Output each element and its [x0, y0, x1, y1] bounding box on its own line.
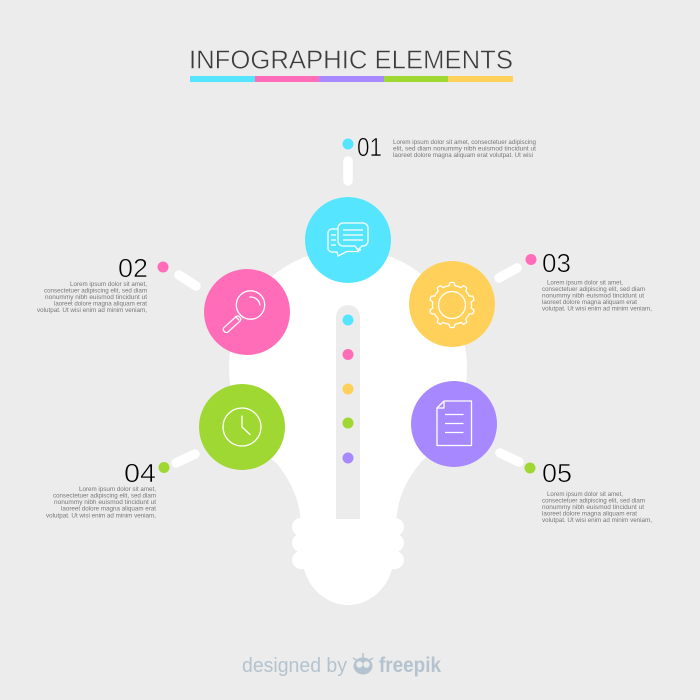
connectors: [176, 161, 519, 463]
item 04 label: volutpat. Ut wisi enim ad minim veniam,: [46, 514, 156, 520]
stem dots: [342, 314, 354, 464]
item 02 circle: magnifier icon: [204, 269, 290, 355]
item 03 label: volutpat. Ut wisi enim ad minim veniam,: [542, 306, 652, 312]
item 03 circle: gear icon: [409, 261, 495, 347]
item 05 label: [524, 460, 652, 524]
item 03 label: [526, 250, 652, 312]
bulb filament stem: [336, 305, 360, 519]
item 05 circle: document icon: [411, 381, 497, 467]
footer: designed by freepik: [242, 653, 441, 677]
item 04 label: 04: [124, 460, 156, 488]
item 03 label: Lorem ipsum dolor sit amet,: [547, 280, 623, 286]
item 04 label: Lorem ipsum dolor sit amet,: [79, 487, 156, 493]
item 01 label: Lorem ipsum dolor sit amet, consectetuer adipiscing: [393, 140, 536, 146]
item 03 label: nonummy nibh euismod tincidunt ut: [542, 294, 644, 300]
item 05 label: laoreet dolore magna aliquam erat: [542, 512, 637, 518]
item 02 label: [37, 255, 168, 314]
item 05 label: nonummy nibh euismod tincidunt ut: [542, 505, 644, 511]
item 03 label: consectetuer adipiscing elit, sed diam: [542, 287, 645, 293]
item 01 circle: chat icon: [305, 197, 391, 283]
item 01 label: elit, sed diam nonummy nibh euismod tincidunt ut: [393, 146, 536, 152]
item 01 label: 01: [357, 134, 382, 162]
item 05 label: consectetuer adipiscing elit, sed diam: [542, 498, 645, 504]
item 05 label: volutpat. Ut wisi enim ad minim veniam,: [542, 518, 652, 524]
item 03 label: laoreet dolore magna aliquam erat: [542, 300, 637, 306]
title: INFOGRAPHIC ELEMENTS: [189, 46, 513, 74]
item 04 label: consectetuer adipiscing elit, sed diam: [53, 494, 156, 500]
item 04 label: nonummy nibh euismod tincidunt ut: [54, 500, 156, 506]
item 02 label: consectetuer adipiscing elit, sed diam: [44, 288, 147, 294]
item 02 label: Lorem ipsum dolor sit amet,: [70, 282, 147, 288]
title colour bar: [190, 76, 513, 82]
footer: designed by freepik: designed by: [242, 655, 347, 677]
light bulb: [229, 249, 467, 605]
item 02 label: 02: [118, 255, 148, 283]
item 05 label: Lorem ipsum dolor sit amet,: [547, 492, 623, 498]
item 04 label: laoreet dolore magna aliquam erat: [61, 506, 156, 512]
footer: designed by freepik: freepik: [379, 654, 441, 677]
icon: freepik mascot: [353, 653, 373, 674]
item 02 label: nonummy nibh euismod tincidunt ut: [45, 295, 147, 301]
item 02 label: volutpat. Ut wisi enim ad minim veniam,: [37, 308, 147, 314]
item 02 label: laoreet dolore magna aliquam erat: [54, 302, 147, 308]
item 04 circle: clock icon: [199, 384, 285, 470]
item 05 label: 05: [542, 460, 572, 488]
item 01 label: [342, 134, 536, 162]
item 01 label: laoreet dolore magna aliquam erat volutpat. Ut wisi: [393, 153, 533, 159]
item 04 label: [46, 460, 170, 520]
item 03 label: 03: [542, 250, 571, 278]
